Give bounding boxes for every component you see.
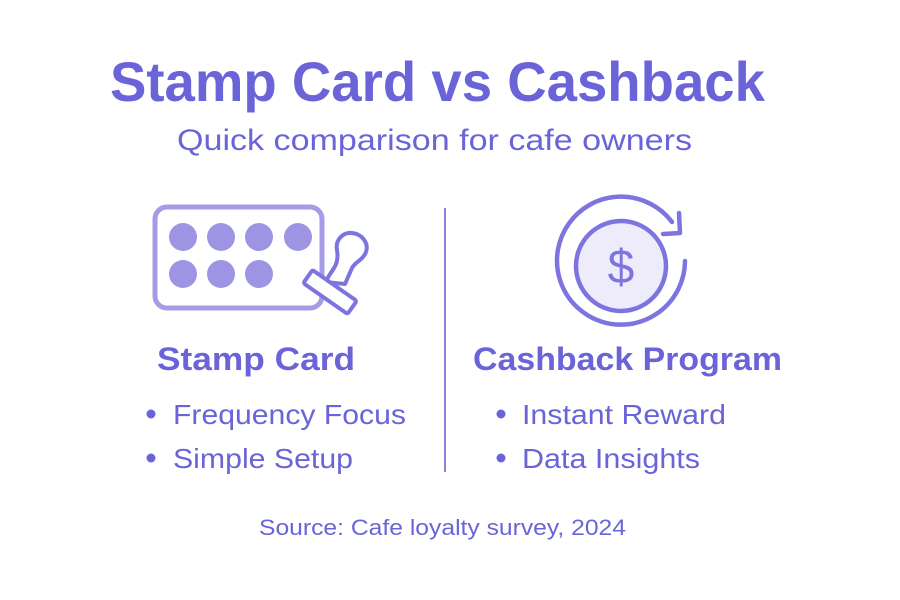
bullets: cashback: Instant Reward [522, 399, 726, 430]
divider [444, 208, 446, 472]
title: Stamp Card vs Cashback [110, 50, 766, 113]
icon: cashback coin: $ [608, 241, 634, 294]
heading: cashback program: Cashback Program [473, 341, 782, 377]
heading: stamp card: Stamp Card [157, 341, 355, 377]
source: Source: Cafe loyalty survey, 2024 [259, 515, 626, 540]
bullets: stamp card: Simple Setup [173, 443, 353, 474]
bullets: stamp card: Frequency Focus [173, 399, 406, 430]
icon: stamp card [155, 207, 367, 314]
icon: cashback coin [557, 197, 685, 325]
bullets: cashback [496, 399, 726, 474]
subtitle: Quick comparison for cafe owners [177, 124, 692, 157]
bullets: stamp card [146, 399, 406, 474]
bullets: cashback: Data Insights [522, 443, 700, 474]
